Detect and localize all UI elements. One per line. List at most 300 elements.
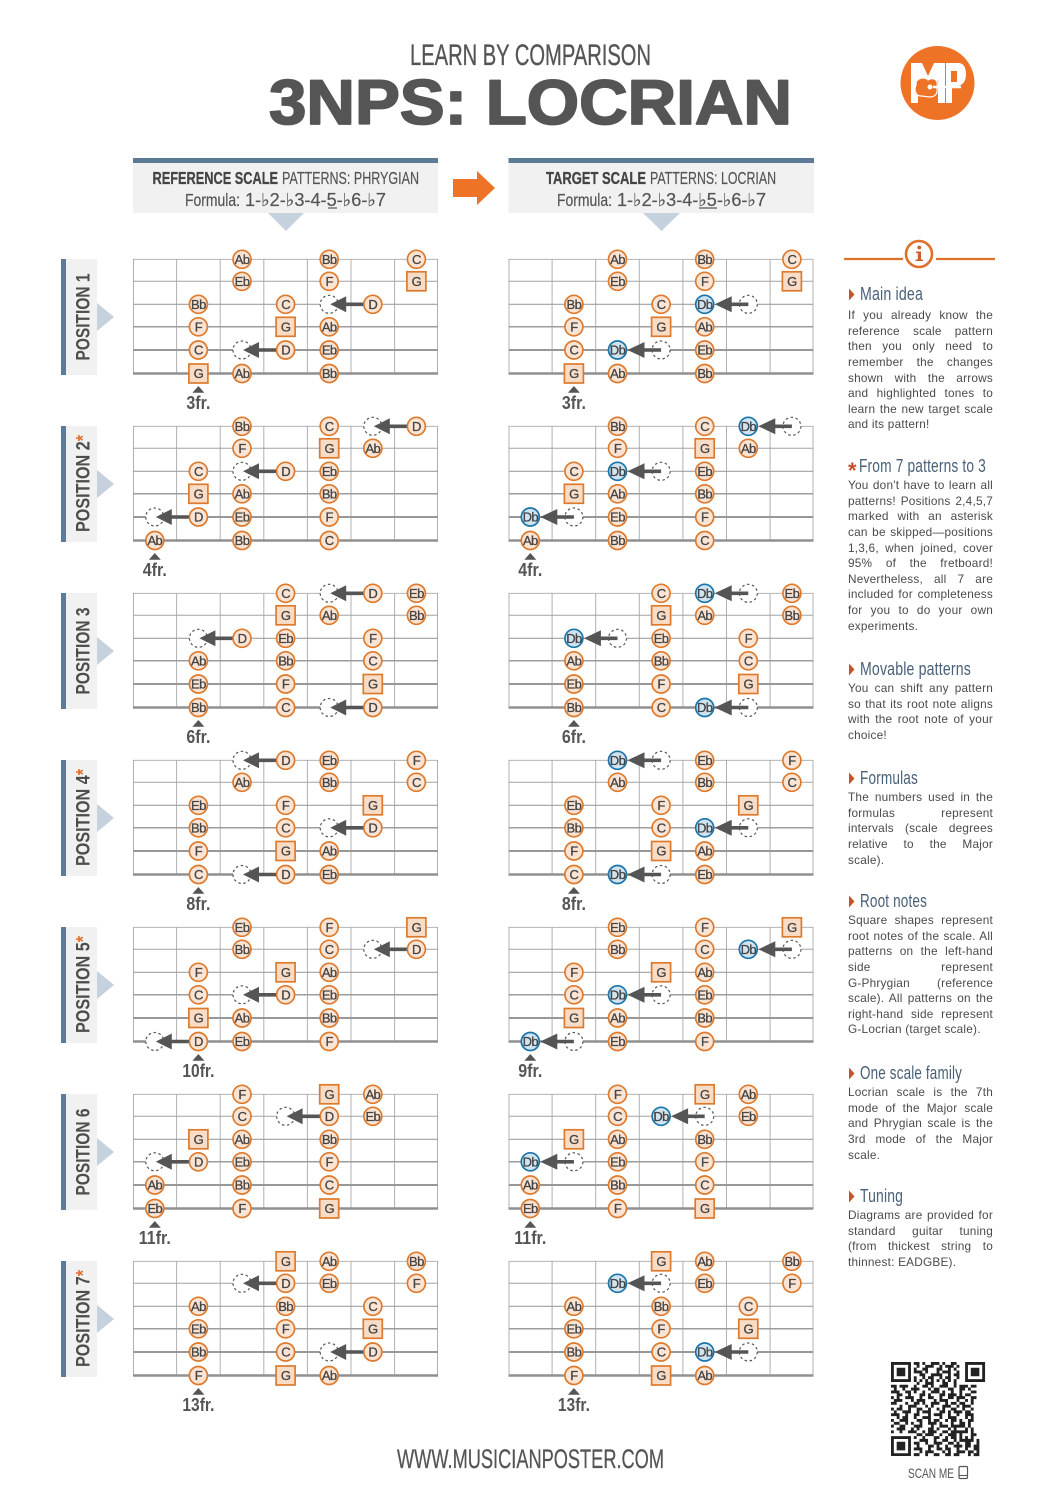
- fretboard: position 6 target: F: [614, 1201, 622, 1216]
- fret marker: [182, 1054, 214, 1081]
- arrow: [540, 1154, 574, 1170]
- fretboard: position 6 reference: Ab: [147, 1178, 163, 1193]
- fretboard: position 1 target: F: [570, 319, 578, 334]
- fretboard: position 3 target: Db: [566, 631, 582, 646]
- arrow: [758, 418, 792, 434]
- label: position 7: POSITION 7*: [74, 1269, 94, 1367]
- fretboard: position 7 target: C: [744, 1299, 753, 1314]
- arrow: [540, 1034, 574, 1050]
- label: position 5: POSITION 5*: [74, 935, 94, 1033]
- arrow: [243, 987, 276, 1003]
- fretboard: position 6 reference: F: [238, 1087, 246, 1102]
- fretboard: position 7 target: F: [788, 1276, 796, 1291]
- fretboard: position 6 reference: Eb: [147, 1201, 163, 1216]
- fretboard: position 7 reference: G: [281, 1368, 291, 1383]
- text block: main idea: Main idea: [860, 283, 923, 304]
- arrow: [243, 752, 276, 768]
- fretboard: position 3 reference: Eb: [191, 676, 206, 691]
- fretboard: position 5 target: F: [701, 1034, 709, 1049]
- arrow: [715, 296, 748, 312]
- fretboard: position 6 reference: D: [325, 1109, 334, 1124]
- fretboard: position 5 target: C: [570, 987, 579, 1002]
- fretboard: position 6 reference: Eb: [235, 1154, 250, 1169]
- fretboard: position 5 reference: D: [412, 942, 421, 957]
- fretboard: position 4 reference: F: [282, 798, 290, 813]
- fretboard: position 2 reference: F: [326, 509, 334, 524]
- fretboard: position 6 reference: G: [324, 1201, 334, 1216]
- fretboard: position 7 target: F: [657, 1321, 665, 1336]
- fretboard: position 3 target: G: [744, 676, 754, 691]
- fretboard: position 3 reference: C: [281, 586, 290, 601]
- fretboard: position 1 target: Db: [697, 297, 713, 312]
- fretboard: position 1 target: Db: [610, 342, 626, 357]
- fretboard: position 1 reference: C: [194, 342, 203, 357]
- arrow: [243, 1275, 276, 1291]
- arrow: [715, 700, 748, 716]
- fretboard: position 1 target: Ab: [610, 252, 625, 267]
- text block: root notes: [848, 890, 993, 1036]
- title: 3NPS: LOCRIAN: [269, 68, 792, 138]
- fretboard: position 5 target: G: [787, 920, 797, 935]
- fretboard: position 7 reference: Bb: [409, 1254, 424, 1269]
- fret marker: [558, 1388, 590, 1415]
- fretboard: position 4 target: Bb: [567, 820, 582, 835]
- fret marker: 11fr.: [514, 1228, 546, 1248]
- fretboard: position 7 reference: D: [368, 1345, 377, 1360]
- fretboard: position 5 target: C: [700, 942, 709, 957]
- fretboard: position 2 target: F: [701, 509, 709, 524]
- fretboard: position 6 reference: Bb: [322, 1132, 337, 1147]
- fret marker: [139, 1221, 171, 1248]
- fretboard: position 4 reference: Ab: [322, 843, 337, 858]
- fretboard: position 6 target: Bb: [610, 1178, 625, 1193]
- fretboard: position 1 reference: G: [281, 319, 291, 334]
- arrow: [540, 509, 574, 525]
- fretboard: position 6 reference: F: [238, 1201, 246, 1216]
- fretboard: position 2 target: Ab: [610, 486, 625, 501]
- text block: movable patterns: [848, 658, 993, 742]
- fretboard: position 3 reference: Bb: [409, 608, 424, 623]
- fretboard: position 1 reference: G: [194, 366, 204, 381]
- panel: target scale header: PATTERNS: LOCRIAN: [650, 168, 776, 188]
- text block: root notes: G-Locrian (target scale).: [848, 1022, 981, 1036]
- fret marker: 10fr.: [182, 1061, 214, 1081]
- fretboard: position 2 target: C: [700, 533, 709, 548]
- arrow: [199, 630, 232, 646]
- fretboard: position 2 target: G: [569, 486, 579, 501]
- fretboard: position 3 reference: F: [282, 676, 290, 691]
- fretboard: position 3 reference: Eb: [278, 631, 293, 646]
- fretboard: position 2 reference: [133, 417, 438, 580]
- fretboard: position 2 target: Ab: [741, 441, 756, 456]
- fretboard: position 5 target: G: [656, 965, 666, 980]
- text block: from 7 patterns to 3: [848, 455, 993, 633]
- fretboard: position 6 target: G: [700, 1201, 710, 1216]
- fretboard: position 2 reference: Eb: [322, 464, 337, 479]
- fretboard: position 4 target: Db: [610, 753, 626, 768]
- fretboard: position 7 target: F: [570, 1368, 578, 1383]
- fretboard: position 5 target: Bb: [610, 942, 625, 957]
- arrow: [628, 987, 661, 1003]
- fretboard: position 4 reference: Eb: [322, 753, 337, 768]
- fretboard: position 4 reference: G: [281, 843, 291, 858]
- fretboard: position 2 reference: D: [281, 464, 290, 479]
- fretboard: position 3 target: F: [657, 676, 665, 691]
- fret marker: [562, 720, 586, 747]
- fretboard: position 7 reference: F: [413, 1276, 421, 1291]
- arrow: [156, 509, 189, 525]
- fretboard: position 2 reference: Bb: [235, 419, 250, 434]
- arrow: [287, 1108, 320, 1124]
- fretboard: position 6 target: Eb: [610, 1154, 625, 1169]
- fretboard: position 7 reference: Bb: [191, 1345, 206, 1360]
- fretboard: position 7 target: Bb: [654, 1299, 669, 1314]
- fretboard: position 7 reference: D: [281, 1276, 290, 1291]
- fretboard: position 6 target: Ab: [741, 1087, 756, 1102]
- fret marker: [186, 887, 210, 914]
- fretboard: position 5 target: Db: [741, 942, 756, 957]
- fretboard: position 2 reference: Ab: [147, 533, 163, 548]
- text block: movable patterns: with the root note of your: [848, 712, 993, 726]
- fretboard: position 1 reference: D: [281, 342, 290, 357]
- fretboard: position 6 target: F: [614, 1087, 622, 1102]
- text block: formulas: The numbers used in the: [848, 790, 993, 804]
- fretboard: position 5 reference: F: [195, 965, 203, 980]
- fret marker: [143, 553, 167, 580]
- fret marker: [186, 386, 210, 413]
- fretboard: position 4 target: C: [788, 775, 797, 790]
- fretboard: position 7 reference: G: [368, 1321, 378, 1336]
- fretboard: position 4 reference: D: [281, 753, 290, 768]
- fretboard: position 4 target: F: [570, 843, 578, 858]
- arrow: [330, 296, 363, 312]
- fretboard: position 1 reference: F: [326, 274, 334, 289]
- fretboard: position 7 target: Ab: [697, 1368, 712, 1383]
- fretboard: position 5 reference: C: [325, 942, 334, 957]
- text block: tuning: standard guitar tuning: [848, 1224, 993, 1238]
- fretboard: position 6 reference: C: [238, 1109, 247, 1124]
- fret marker: 6fr.: [186, 727, 210, 747]
- fret marker: [186, 720, 210, 747]
- label: position 1: [61, 259, 114, 375]
- fretboard: position 2 reference: F: [238, 441, 246, 456]
- fret marker: [182, 1388, 214, 1415]
- fretboard: position 6 target: Bb: [697, 1132, 712, 1147]
- fretboard: position 4 target: [508, 751, 814, 914]
- icon: brand logo: [900, 46, 974, 120]
- fretboard: position 4 reference: D: [281, 867, 290, 882]
- text block: tuning: Diagrams are provided for: [848, 1208, 993, 1222]
- fretboard: position 2 reference: G: [194, 486, 204, 501]
- fret marker: 8fr.: [562, 894, 586, 914]
- fretboard: position 3 reference: D: [368, 586, 377, 601]
- text block: tuning: [848, 1185, 993, 1269]
- fretboard: position 7 reference: F: [195, 1368, 203, 1383]
- text block: main idea: remember the changes: [848, 355, 993, 369]
- fretboard: position 2 reference: C: [325, 419, 334, 434]
- text block: one scale family: One scale family: [860, 1062, 962, 1083]
- fretboard: position 5 target: Eb: [697, 987, 712, 1002]
- fretboard: position 3 target: Bb: [567, 700, 582, 715]
- panel: target scale header: Formula:: [557, 190, 612, 210]
- text block: root notes: root notes of the scale. All: [848, 929, 993, 943]
- fretboard: position 5 reference: Ab: [235, 1010, 250, 1025]
- text block: from 7 patterns to 3: marked with an asterisk: [848, 509, 993, 523]
- text block: one scale family: [848, 1062, 993, 1162]
- arrow: [715, 1344, 748, 1360]
- fretboard: position 3 reference: Ab: [191, 653, 206, 668]
- fretboard: position 4 reference: C: [412, 775, 421, 790]
- fretboard: position 2 reference: Ab: [365, 441, 381, 456]
- fretboard: position 5 reference: C: [194, 987, 203, 1002]
- fretboard: position 2 reference: Ab: [235, 486, 250, 501]
- fretboard: position 1 reference: Ab: [235, 366, 250, 381]
- fretboard: position 3 reference: C: [281, 700, 290, 715]
- arrow: [374, 941, 407, 957]
- arrow: [156, 1034, 189, 1050]
- icon: info divider: [844, 241, 995, 267]
- fretboard: position 6 reference: Bb: [235, 1178, 250, 1193]
- text block: formulas: [848, 767, 993, 867]
- fretboard: position 5 reference: D: [194, 1034, 203, 1049]
- fretboard: position 2 reference: Bb: [235, 533, 250, 548]
- fretboard: position 1 reference: Bb: [191, 297, 206, 312]
- fretboard: position 3 reference: G: [281, 608, 291, 623]
- label: position 3: POSITION 3: [74, 608, 94, 694]
- fretboard: position 6 reference: C: [325, 1178, 334, 1193]
- label: position 2: [61, 426, 114, 542]
- fretboard: position 7 reference: Ab: [322, 1368, 337, 1383]
- fret marker: 13fr.: [558, 1395, 590, 1415]
- fret marker: [518, 1054, 542, 1081]
- fretboard: position 2 reference: G: [324, 441, 334, 456]
- fretboard: position 5 target: Ab: [610, 1010, 625, 1025]
- fretboard: position 4 reference: Eb: [191, 798, 206, 813]
- arrow: [243, 866, 276, 882]
- fretboard: position 5 reference: Eb: [235, 1034, 250, 1049]
- fretboard: position 1 reference: Ab: [235, 252, 250, 267]
- fretboard: position 3 target: Db: [697, 700, 713, 715]
- fretboard: position 7 reference: F: [282, 1321, 290, 1336]
- fretboard: position 4 target: C: [657, 820, 666, 835]
- fretboard: position 4 reference: D: [368, 820, 377, 835]
- fretboard: position 4 target: G: [656, 843, 666, 858]
- text block: from 7 patterns to 3: *: [848, 458, 857, 483]
- fretboard: position 6 reference: G: [194, 1132, 204, 1147]
- fretboard: position 7 reference: [133, 1252, 438, 1415]
- text block: from 7 patterns to 3: included for completeness: [848, 587, 993, 601]
- fretboard: position 3 target: Bb: [785, 608, 800, 623]
- text block: main idea: learn the new target scale: [848, 402, 993, 416]
- fretboard: position 5 target: [508, 918, 814, 1081]
- text block: from 7 patterns to 3: experiments.: [848, 619, 918, 633]
- fretboard: position 5 reference: F: [326, 1034, 334, 1049]
- fretboard: position 2 target: Db: [610, 464, 626, 479]
- fretboard: position 7 target: G: [656, 1254, 666, 1269]
- fretboard: position 1 reference: C: [412, 252, 421, 267]
- subtitle: LEARN BY COMPARISON: [410, 39, 651, 72]
- fretboard: position 3 target: Eb: [567, 676, 582, 691]
- fretboard: position 2 target: Bb: [697, 486, 712, 501]
- text block: main idea: shown with the arrows: [848, 371, 993, 385]
- panel: reference scale header: REFERENCE SCALE: [152, 168, 278, 188]
- arrow: [715, 820, 748, 836]
- fretboard: position 5 target: Db: [610, 987, 626, 1002]
- arrow: [628, 752, 661, 768]
- fretboard: position 4 reference: C: [194, 867, 203, 882]
- text block: root notes: Square shapes represent: [848, 913, 993, 927]
- text block: root notes: scale). All patterns on the: [848, 991, 993, 1005]
- text block: from 7 patterns to 3: From 7 patterns to 3: [859, 455, 986, 476]
- fretboard: position 6 reference: D: [194, 1154, 203, 1169]
- text block: formulas: Formulas: [860, 767, 918, 788]
- fretboard: position 2 reference: D: [194, 509, 203, 524]
- text block: from 7 patterns to 3: Nevertheless, all 7 are: [848, 572, 993, 586]
- fretboard: position 7 target: G: [656, 1368, 666, 1383]
- label: position 7: [61, 1261, 114, 1377]
- arrow: [584, 630, 618, 646]
- fret marker: 9fr.: [518, 1061, 542, 1081]
- label: position 5: [61, 927, 114, 1043]
- fretboard: position 3 target: F: [745, 631, 753, 646]
- fretboard: position 2 reference: C: [325, 533, 334, 548]
- fretboard: position 6 reference: Ab: [235, 1132, 250, 1147]
- fretboard: position 2 target: C: [700, 419, 709, 434]
- fretboard: position 6 target: Ab: [610, 1132, 625, 1147]
- fretboard: position 4 target: Bb: [697, 775, 712, 790]
- fretboard: position 6 reference: F: [326, 1154, 334, 1169]
- fretboard: position 3 reference: [133, 584, 438, 747]
- text block: one scale family: Locrian scale is the 7th: [848, 1085, 993, 1099]
- fretboard: position 1 target: Bb: [567, 297, 582, 312]
- fret marker: 8fr.: [186, 894, 210, 914]
- fretboard: position 1 target: Eb: [610, 274, 625, 289]
- fretboard: position 6 target: F: [701, 1154, 709, 1169]
- fretboard: position 2 target: Db: [523, 509, 538, 524]
- fretboard: position 6 target: C: [700, 1178, 709, 1193]
- fretboard: position 1 reference: C: [281, 297, 290, 312]
- panel: reference scale header: Formula:: [185, 190, 240, 210]
- text block: main idea: and highlighted tones to: [848, 386, 993, 400]
- label: position 2: POSITION 2*: [74, 434, 94, 532]
- fretboard: position 1 target: [508, 250, 814, 413]
- fretboard: position 7 target: Bb: [785, 1254, 800, 1269]
- fretboard: position 1 target: F: [701, 274, 709, 289]
- QR code: [891, 1362, 985, 1456]
- fretboard: position 3 reference: D: [238, 631, 247, 646]
- fretboard: position 5 target: Eb: [610, 920, 625, 935]
- fretboard: position 6 target: Db: [523, 1154, 538, 1169]
- fretboard: position 1 reference: F: [195, 319, 203, 334]
- fretboard: position 6 target: [508, 1085, 814, 1248]
- fretboard: position 5 target: Bb: [697, 1010, 712, 1025]
- fretboard: position 5 reference: G: [412, 920, 422, 935]
- text block: formulas: scale).: [848, 853, 884, 867]
- label: position 6: [61, 1094, 114, 1210]
- fretboard: position 1 target: C: [570, 342, 579, 357]
- fretboard: position 4 reference: F: [195, 843, 203, 858]
- fretboard: position 5 reference: G: [194, 1010, 204, 1025]
- fretboard: position 1 target: Ab: [697, 319, 712, 334]
- arrow: [156, 1154, 189, 1170]
- text block: root notes: patterns on the left-hand: [848, 944, 993, 958]
- arrow: reference to target: [453, 171, 495, 205]
- arrow: [628, 866, 661, 882]
- fretboard: position 6 target: Ab: [523, 1178, 538, 1193]
- panel: reference scale header: PATTERNS: PHRYGIAN: [282, 168, 419, 188]
- fretboard: position 6 target: Eb: [741, 1109, 756, 1124]
- fretboard: position 4 target: C: [570, 867, 579, 882]
- fretboard: position 5 reference: D: [281, 987, 290, 1002]
- fretboard: position 1 target: Ab: [610, 366, 625, 381]
- fretboard: position 7 reference: G: [281, 1254, 291, 1269]
- arrow: [243, 463, 276, 479]
- fretboard: position 1 reference: [133, 250, 438, 413]
- fret marker: 3fr.: [186, 393, 210, 413]
- fretboard: position 1 target: C: [657, 297, 666, 312]
- fretboard: position 4 reference: F: [413, 753, 421, 768]
- fretboard: position 3 target: Ab: [567, 653, 582, 668]
- fretboard: position 7 reference: Bb: [278, 1299, 293, 1314]
- fretboard: position 6 target: G: [569, 1132, 579, 1147]
- arrow: [628, 463, 661, 479]
- fretboard: position 6 target: Eb: [523, 1201, 538, 1216]
- text block: formulas: relative to the Major: [848, 837, 993, 851]
- fretboard: position 1 reference: Ab: [322, 319, 337, 334]
- fretboard: position 4 target: Ab: [697, 843, 712, 858]
- fretboard: position 5 reference: Bb: [235, 942, 250, 957]
- text block: main idea: and its pattern!: [848, 417, 930, 431]
- text block: one scale family: and Phrygian scale is the: [848, 1116, 993, 1130]
- fretboard: position 7 reference: Ab: [322, 1254, 337, 1269]
- fret marker: 4fr.: [518, 560, 542, 580]
- fretboard: position 3 target: C: [657, 586, 666, 601]
- panel: reference scale header: 1-♭2-♭3-4-5-♭6-♭7: [245, 190, 386, 210]
- fretboard: position 5 reference: Eb: [235, 920, 250, 935]
- fretboard: position 7 target: Eb: [567, 1321, 582, 1336]
- fretboard: position 4 target: Eb: [567, 798, 582, 813]
- fretboard: position 1 target: Eb: [697, 342, 712, 357]
- arrow: [628, 1275, 661, 1291]
- text block: main idea: reference scale pattern: [848, 324, 993, 338]
- fretboard: position 3 reference: Eb: [409, 586, 424, 601]
- fretboard: position 1 reference: Bb: [322, 366, 337, 381]
- fretboard: position 1 target: G: [787, 274, 797, 289]
- fretboard: position 7 target: Ab: [567, 1299, 582, 1314]
- arrow: [671, 1108, 705, 1124]
- fretboard: position 3 target: Db: [697, 586, 713, 601]
- label: position 4: POSITION 4*: [74, 768, 94, 866]
- fretboard: position 3 reference: C: [368, 653, 377, 668]
- arrow: [758, 941, 792, 957]
- fretboard: position 7 target: Db: [697, 1345, 713, 1360]
- website footer: WWW.MUSICIANPOSTER.COM: [397, 1444, 664, 1474]
- fretboard: position 5 reference: [133, 918, 438, 1081]
- fretboard: position 7 reference: Eb: [322, 1276, 337, 1291]
- text block: one scale family: scale.: [848, 1148, 880, 1162]
- fretboard: position 7 target: Bb: [567, 1345, 582, 1360]
- fretboard: position 6 reference: Eb: [365, 1109, 381, 1124]
- panel: target scale header: [508, 158, 814, 231]
- fretboard: position 6 target: Db: [653, 1109, 669, 1124]
- fretboard: position 1 reference: Eb: [235, 274, 250, 289]
- text block: movable patterns: choice!: [848, 728, 887, 742]
- label: position 1: POSITION 1: [74, 273, 94, 360]
- fretboard: position 2 target: Db: [741, 419, 756, 434]
- fretboard: position 1 target: G: [569, 366, 579, 381]
- arrow: [715, 585, 748, 601]
- fretboard: position 5 target: Eb: [610, 1034, 625, 1049]
